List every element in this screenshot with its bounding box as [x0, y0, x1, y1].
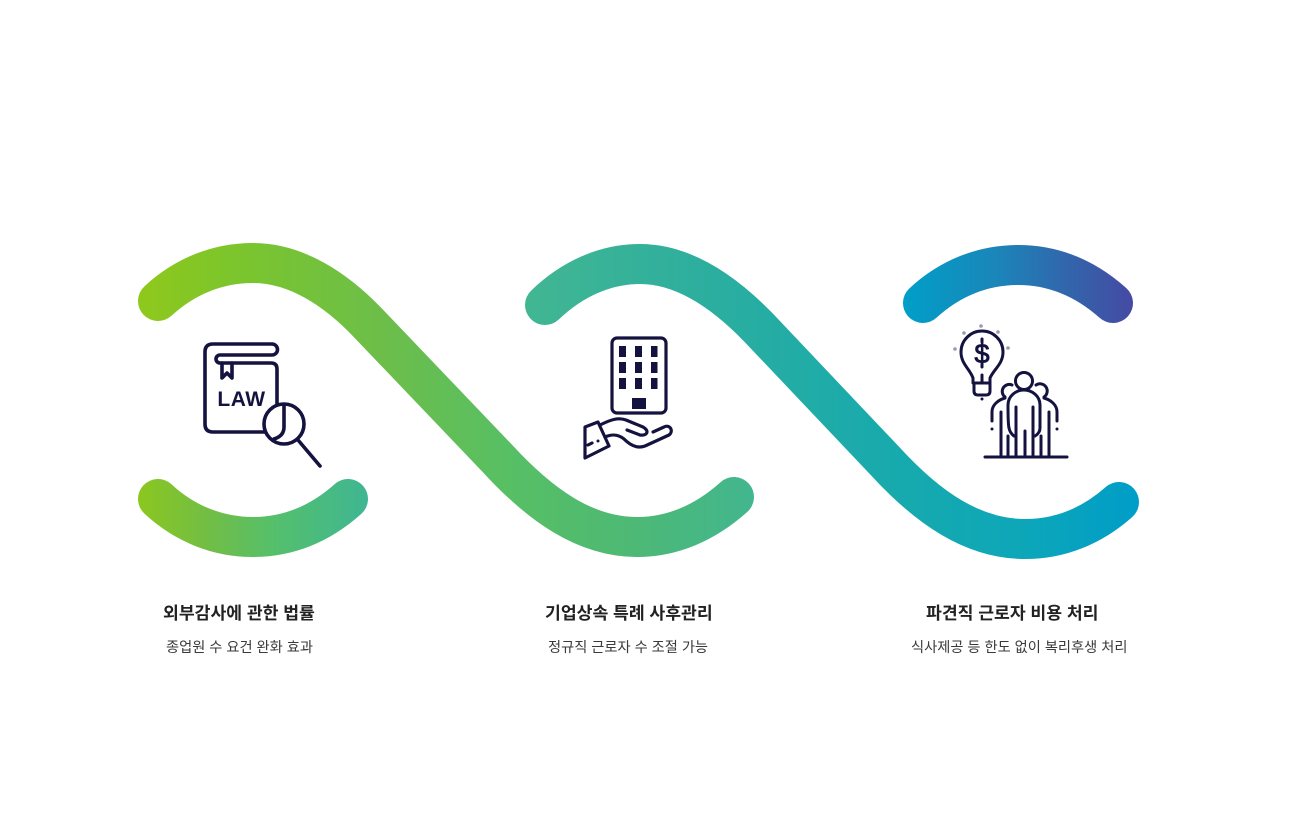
icon: law book with magnifier: LAW	[217, 388, 266, 411]
ribbon: lower left arc	[158, 499, 348, 537]
text: regular staff adjustment: 정규직 근로자 수 조절 가능	[548, 640, 708, 656]
text: welfare cost handling: 식사제공 등 한도 없이 복리후생 처리	[911, 640, 1127, 656]
icon: idea bulb and people: $	[974, 339, 990, 369]
icon: building on open hand	[585, 338, 671, 458]
heading: external audit law: 외부감사에 관한 법률	[163, 603, 315, 623]
heading: family business succession: 기업상속 특례 사후관리	[545, 603, 713, 623]
ribbon: teal wave	[545, 264, 1119, 539]
text: employee requirement relief: 종업원 수 요건 완화 효과	[166, 640, 313, 656]
icon: law book with magnifier	[205, 344, 320, 466]
icon: idea bulb and people	[953, 324, 1067, 457]
heading: dispatched worker cost: 파견직 근로자 비용 처리	[926, 603, 1098, 623]
ribbon: green wave	[158, 263, 734, 537]
ribbon: upper right arc	[923, 265, 1113, 303]
